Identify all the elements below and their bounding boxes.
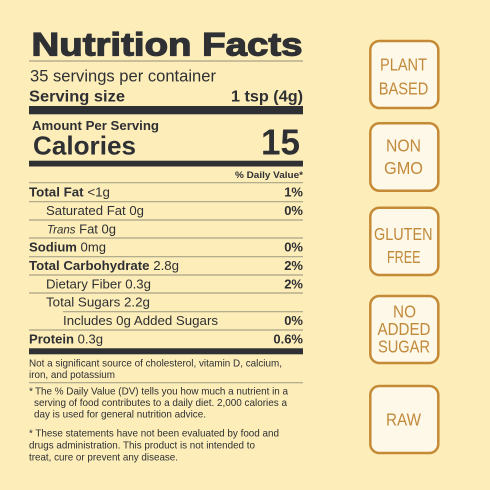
row: total carbohydrate: [29, 258, 303, 273]
note: not a significant source: Not a significant source of cholesterol, vitamin D, calcium,: [29, 359, 282, 370]
note: disclaimer: drugs administration. This product is not intended to: [29, 440, 255, 451]
badge: no added sugar: [370, 296, 438, 363]
badge: plant based: BASED: [379, 78, 428, 98]
row: sodium: 0%: [284, 240, 303, 255]
row: protein: 0.6%: [273, 331, 303, 346]
note: disclaimer: treat, cure or prevent any disease.: [29, 452, 178, 463]
row: total fat: [29, 185, 303, 200]
row: total carbohydrate: Total Carbohydrate 2.8g: [29, 258, 179, 273]
row: saturated fat: [46, 203, 303, 218]
note: not a significant source: [29, 359, 282, 381]
title: Nutrition Facts: [32, 27, 302, 63]
note: daily value explanation: *: [29, 386, 33, 397]
calories: [33, 121, 300, 162]
row: protein: Protein 0.3g: [29, 331, 103, 346]
badge: plant based: PLANT: [380, 55, 427, 75]
badge: non gmo: GMO: [384, 158, 423, 178]
row: added sugars: Includes 0g Added Sugars: [63, 313, 219, 328]
badge: gluten free: [370, 208, 438, 275]
row: protein: [29, 331, 303, 346]
badge: gluten free: GLUTEN: [374, 224, 432, 244]
amount per serving: Amount Per Serving: [32, 119, 159, 133]
row: sodium: [29, 240, 303, 255]
daily value header: % Daily Value*: [235, 170, 303, 181]
serving size: [29, 88, 303, 105]
servings per container: 35 servings per container: [30, 68, 216, 86]
panel: nutrition facts label: [29, 27, 303, 463]
note: daily value explanation: serving of food contributes to a daily diet. 2,000 calories a: [34, 398, 287, 409]
row: added sugars: [63, 313, 303, 328]
row: trans fat: Trans Fat 0g: [47, 222, 116, 236]
badge: plant based: [370, 41, 438, 108]
badge: raw: [370, 386, 438, 453]
note: disclaimer: [29, 429, 279, 463]
badge: raw: RAW: [386, 410, 422, 430]
note: daily value explanation: The % Daily Value (DV) tells you how much a nutrient in a: [35, 386, 288, 397]
row: saturated fat: Saturated Fat 0g: [46, 203, 144, 218]
serving size: Serving size: [29, 88, 125, 105]
badge: non gmo: NON: [386, 136, 421, 156]
badge: no added sugar: SUGAR: [378, 337, 430, 357]
row: total sugars: Total Sugars 2.2g: [46, 295, 150, 310]
row: dietary fiber: Dietary Fiber 0.3g: [46, 276, 151, 291]
serving size: 1 tsp (4g): [231, 88, 303, 105]
row: dietary fiber: [46, 276, 303, 291]
row: total carbohydrate: 2%: [284, 258, 303, 273]
calories: 15: [261, 121, 300, 162]
note: daily value explanation: day is used for general nutrition advice.: [34, 410, 206, 421]
row: sodium: Sodium 0mg: [29, 240, 106, 255]
nutrient table: [29, 185, 303, 346]
row: saturated fat: 0%: [284, 203, 303, 218]
row: total fat: Total Fat <1g: [29, 185, 110, 200]
note: disclaimer: * These statements have not been evaluated by food and: [29, 429, 279, 440]
row: added sugars: 0%: [284, 313, 303, 328]
row: dietary fiber: 2%: [284, 276, 303, 291]
badge: non gmo: [370, 123, 438, 191]
note: daily value explanation: [29, 386, 288, 421]
note: not a significant source: iron, and potassium: [29, 370, 115, 381]
row: total fat: 1%: [284, 185, 303, 200]
badge: no added sugar: NO: [393, 302, 416, 322]
calories: Calories: [33, 130, 136, 160]
badge: gluten free: FREE: [387, 247, 420, 267]
badge: no added sugar: ADDED: [378, 319, 430, 339]
